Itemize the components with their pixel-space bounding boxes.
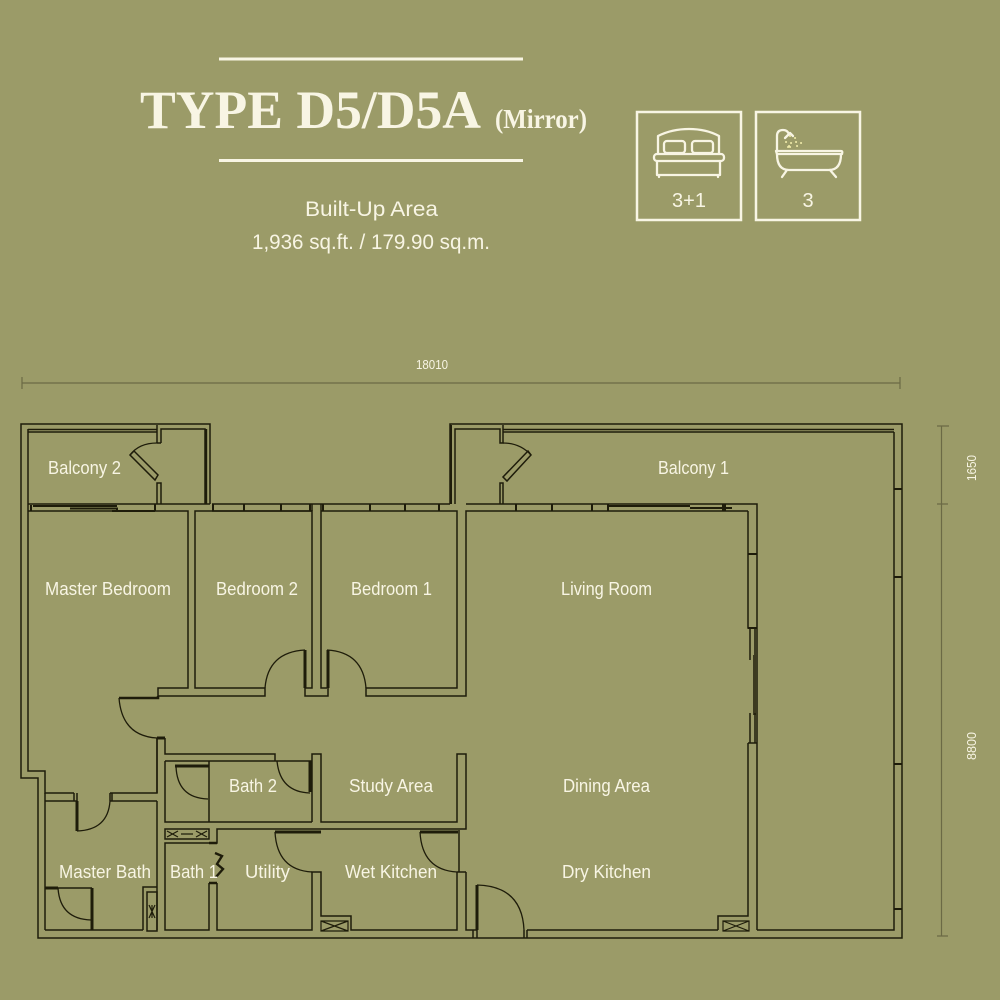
label: Living Room: Living Room xyxy=(561,579,652,599)
built-up area text: 1,936 sq.ft. / 179.90 sq.m. xyxy=(252,231,490,254)
label: Bedroom 1: Bedroom 1 xyxy=(351,579,432,599)
outer walls xyxy=(21,424,902,938)
dimension: overall width xyxy=(22,358,900,389)
dimension: unit depth xyxy=(937,504,979,936)
label: Bedroom 2: Bedroom 2 xyxy=(216,579,298,599)
icon: bathtub with shower xyxy=(776,130,842,177)
built-up area text: Built-Up Area xyxy=(305,198,438,221)
title block xyxy=(140,58,523,162)
core rooms xyxy=(45,738,466,930)
label: Master Bath: Master Bath xyxy=(59,862,151,882)
label: Balcony 2: Balcony 2 xyxy=(48,458,121,478)
floor plan walls xyxy=(21,424,902,938)
living room windows and east wall xyxy=(527,511,757,930)
balcony 1 store and door xyxy=(451,425,531,504)
built-up area text xyxy=(252,198,490,254)
bathroom count card xyxy=(756,112,860,220)
title: type name: TYPE D5/D5A xyxy=(140,80,481,140)
entrance door xyxy=(466,872,527,938)
dimension: balcony depth: 1650 xyxy=(965,455,979,481)
label: Dining Area: Dining Area xyxy=(563,776,651,796)
dimension: overall width: 18010 xyxy=(416,358,448,372)
bathroom count card: 3 xyxy=(802,190,814,212)
bedroom count card: 3+1 xyxy=(672,190,706,212)
dimension: balcony depth xyxy=(937,426,979,504)
label: Balcony 1: Balcony 1 xyxy=(658,458,729,478)
bedroom wing xyxy=(28,504,757,793)
ventilation ducts xyxy=(147,831,749,931)
label: Dry Kitchen: Dry Kitchen xyxy=(562,862,651,882)
label: Master Bedroom: Master Bedroom xyxy=(45,579,171,599)
label: Wet Kitchen: Wet Kitchen xyxy=(345,862,437,882)
room labels xyxy=(45,458,729,882)
label: Study Area: Study Area xyxy=(349,776,434,796)
label: Bath 2: Bath 2 xyxy=(229,776,277,796)
icon: bed xyxy=(654,129,724,177)
master bedroom door xyxy=(119,696,165,738)
dimension: unit depth: 8800 xyxy=(965,732,979,760)
bedroom count card xyxy=(637,112,741,220)
title suffix: mirror: (Mirror) xyxy=(495,104,587,134)
balcony 2 store and door xyxy=(28,425,206,504)
label: Utility: Utility xyxy=(245,862,290,882)
label: Bath 1: Bath 1 xyxy=(170,862,218,882)
